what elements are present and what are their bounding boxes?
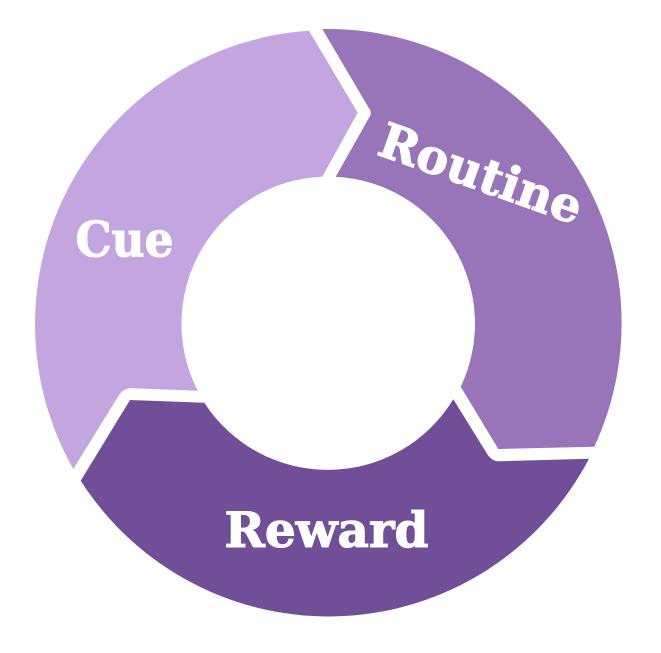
label: Routine: Routine xyxy=(371,113,590,236)
panel: reward segment xyxy=(81,399,589,616)
panel: routine segment xyxy=(322,29,622,449)
label: Reward: Reward xyxy=(224,501,428,559)
label: Cue: Cue xyxy=(76,210,174,268)
